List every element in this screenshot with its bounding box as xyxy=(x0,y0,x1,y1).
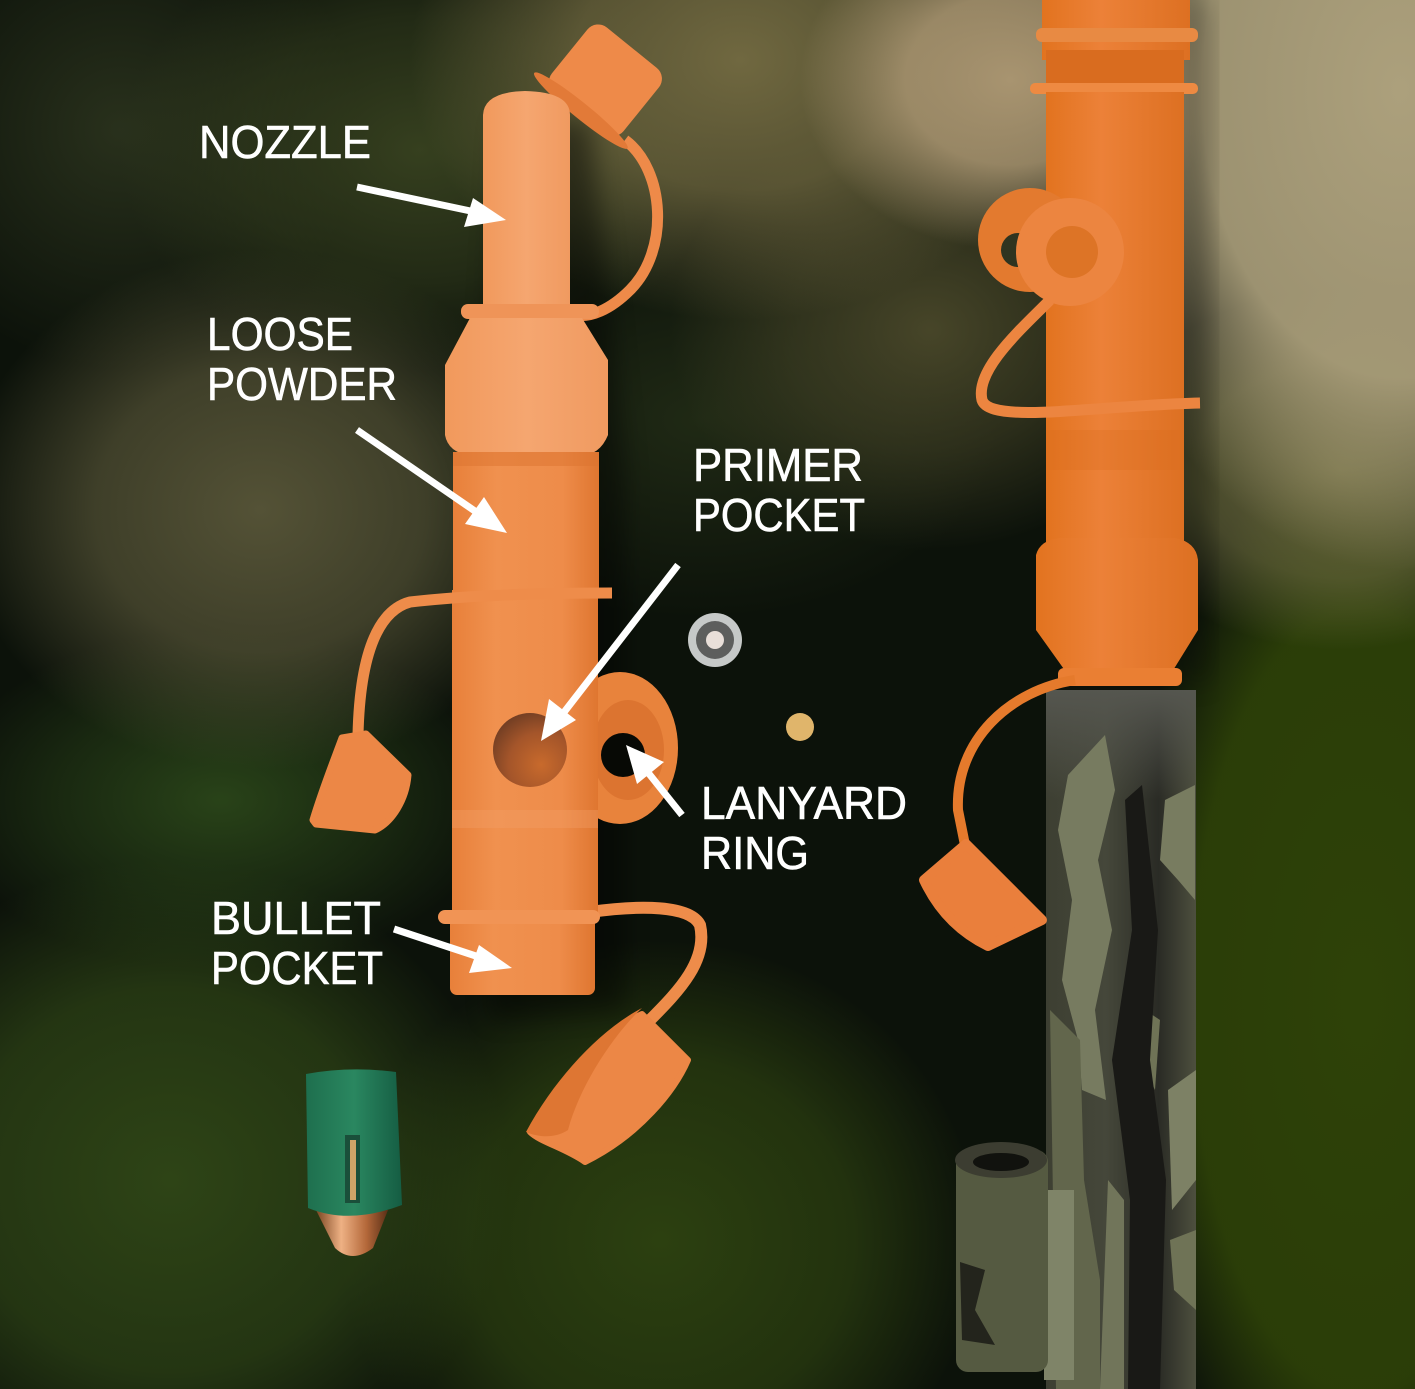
label: nozzle: NOZZLE xyxy=(199,116,371,168)
label: primer pocket: PRIMER xyxy=(693,439,863,491)
right loader shadow xyxy=(1184,0,1206,680)
primer pocket hole xyxy=(493,713,567,787)
label: loose powder: POWDER xyxy=(207,358,397,410)
primer cap xyxy=(688,613,742,667)
label: bullet pocket: POCKET xyxy=(211,942,383,994)
orange loader body xyxy=(1030,0,1198,686)
label: loose powder: LOOSE xyxy=(207,308,353,360)
arrow: bullet pocket xyxy=(394,929,512,973)
right photo: mounted speed loader on pipe xyxy=(924,0,1206,1389)
arrow: primer pocket xyxy=(541,565,678,741)
arrow: nozzle xyxy=(357,187,506,227)
clip tube on pipe xyxy=(955,1142,1074,1380)
central speed loader xyxy=(313,10,701,1162)
primer pellet xyxy=(786,713,814,741)
strap and cap, upper xyxy=(981,300,1200,412)
label: lanyard ring xyxy=(626,745,907,879)
nozzle strap and cap xyxy=(529,10,678,316)
bullet pocket ring xyxy=(438,910,600,924)
label: nozzle xyxy=(199,116,506,227)
bullet in sabot xyxy=(306,1069,402,1256)
arrow: lanyard ring xyxy=(626,745,682,815)
strap lower xyxy=(958,680,1075,860)
bullet pocket strap and cap xyxy=(526,908,701,1162)
label: lanyard ring: RING xyxy=(701,827,809,879)
middle strap and cap xyxy=(313,593,612,830)
lanyard ring xyxy=(562,672,678,824)
label: primer pocket xyxy=(541,439,865,741)
label: bullet pocket xyxy=(211,892,512,994)
lanyard ring xyxy=(978,188,1124,306)
body xyxy=(445,91,608,995)
loader shadow xyxy=(480,120,625,1020)
label: primer pocket: POCKET xyxy=(693,489,865,541)
arrow: loose powder xyxy=(357,430,507,533)
label: bullet pocket: BULLET xyxy=(211,892,381,944)
lower cap xyxy=(924,844,1042,946)
label: lanyard ring: LANYARD xyxy=(701,777,907,829)
label: loose powder xyxy=(207,308,507,533)
camo pipe xyxy=(1046,690,1196,1389)
